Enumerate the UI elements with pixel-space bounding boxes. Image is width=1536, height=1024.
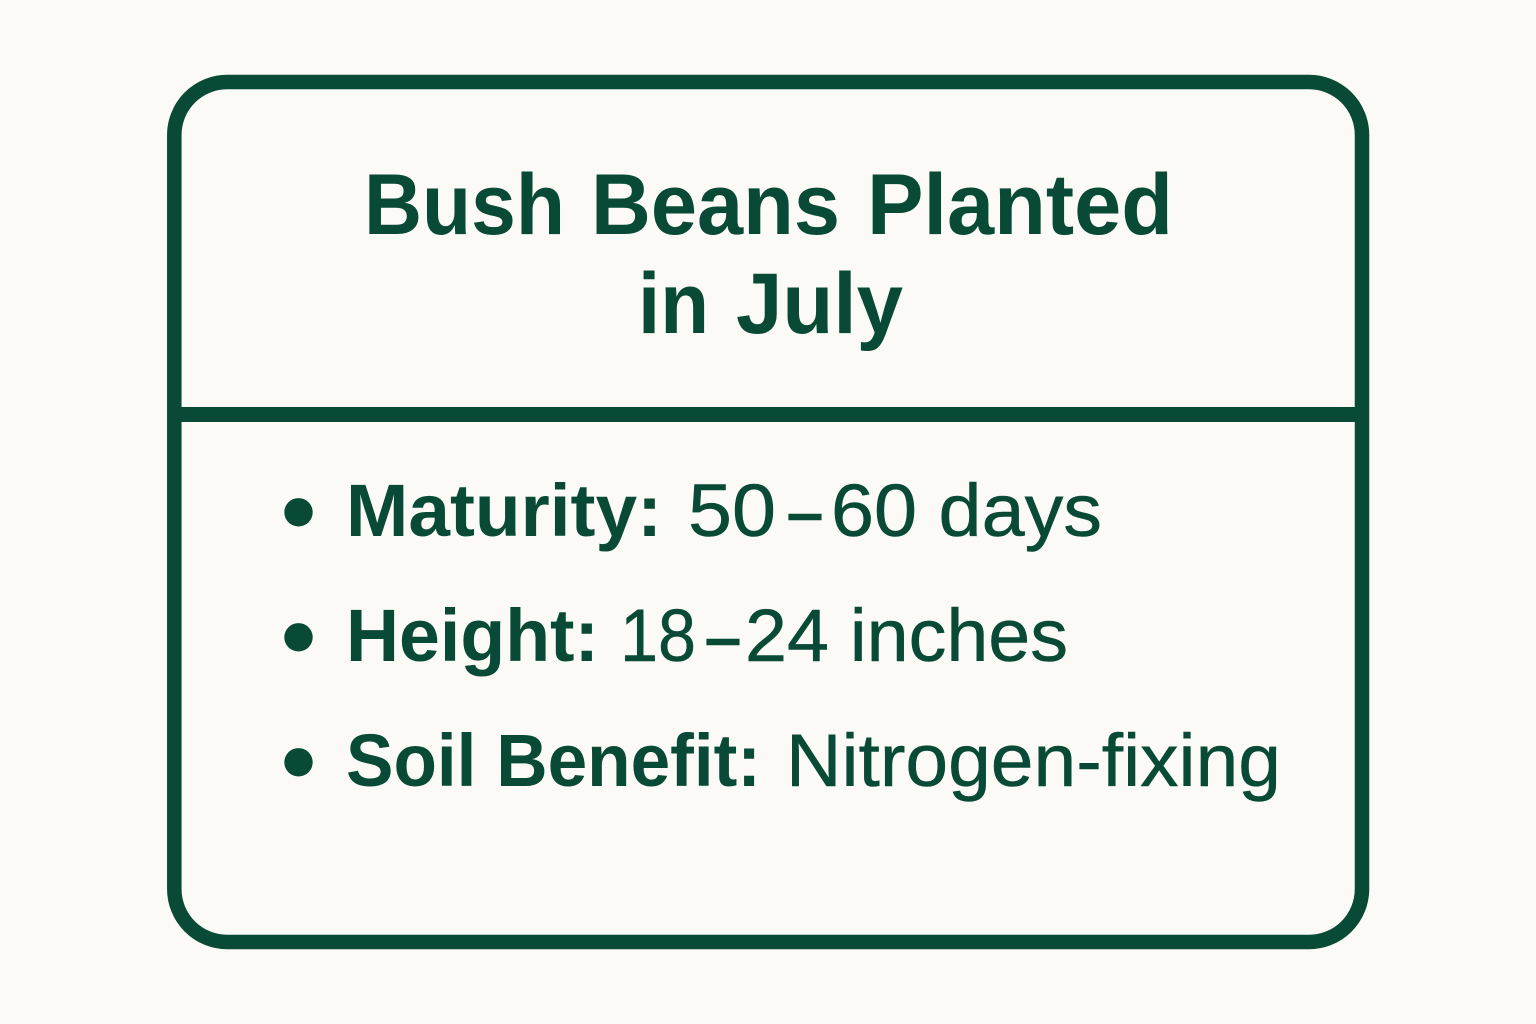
list item: maturity: –: [789, 469, 822, 552]
list item: height: –: [707, 594, 740, 677]
title: July: [736, 256, 903, 352]
list item: maturity: 50: [688, 469, 776, 552]
list item: soil benefit: Soil Benefit:: [346, 719, 761, 802]
title: Planted: [867, 157, 1173, 253]
list item: maturity: [284, 469, 1102, 552]
list item: height: 24 inches: [745, 594, 1068, 677]
title: Bush: [364, 157, 565, 253]
list item: soil benefit: [284, 719, 1281, 802]
list item: height: Height:: [346, 594, 599, 677]
title: [364, 157, 1173, 352]
list item: maturity: Maturity:: [346, 469, 662, 552]
title: in: [638, 256, 709, 352]
list item: soil benefit: Nitrogen-fixing: [786, 719, 1281, 802]
card panel: [174, 82, 1362, 942]
list item: maturity: 60 days: [831, 469, 1102, 552]
list item: height: [284, 594, 1068, 677]
list item: height: 18: [620, 594, 696, 677]
title: Beans: [591, 157, 840, 253]
